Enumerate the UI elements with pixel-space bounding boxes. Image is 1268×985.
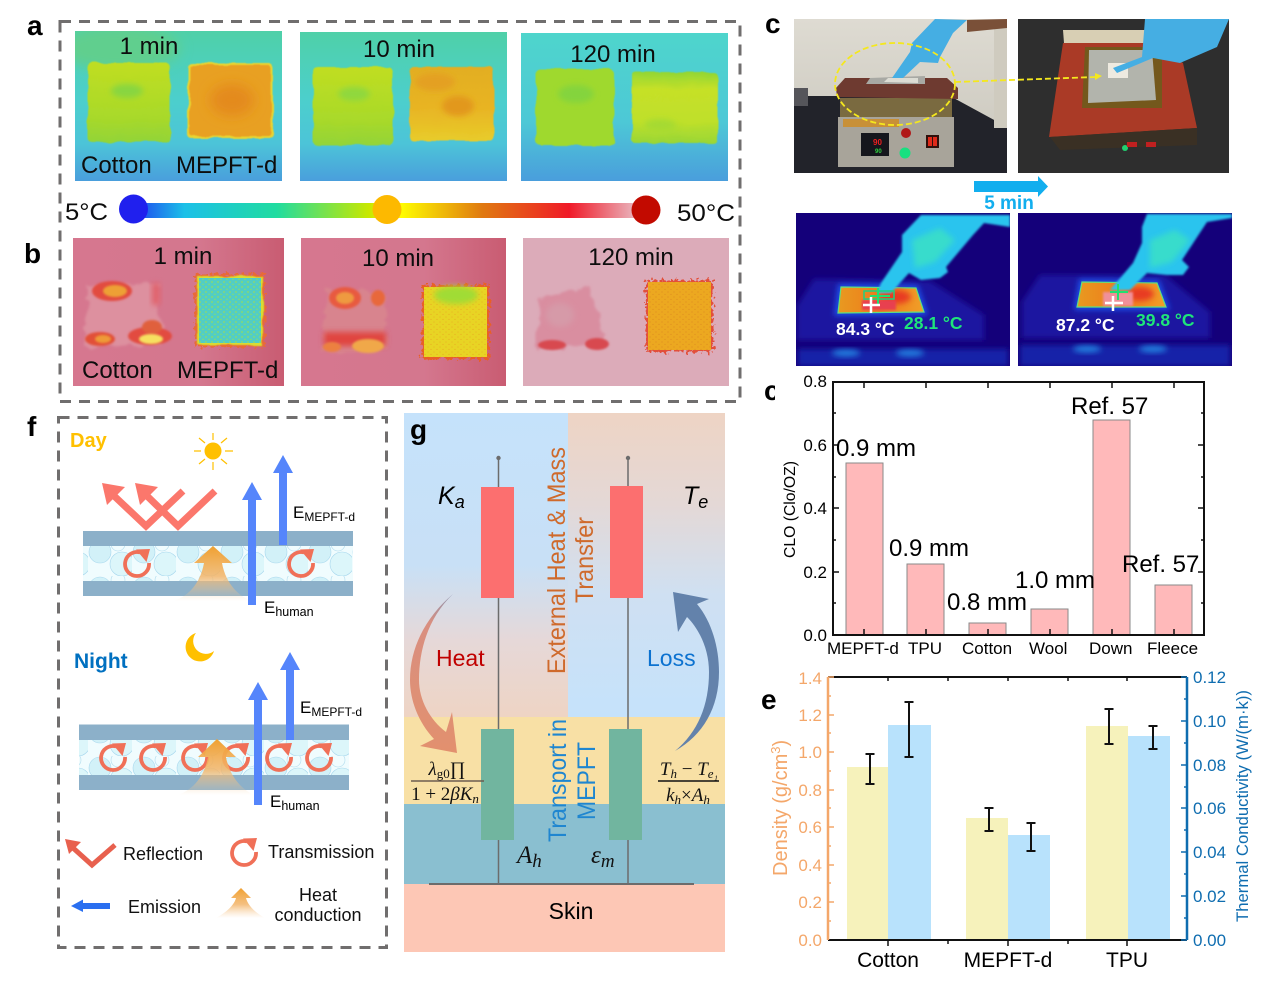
arrow: E MEPFT-d day: [273, 455, 293, 545]
axes and ticks: [833, 382, 1204, 635]
left axis labels: 0.8: [798, 781, 822, 800]
y axis title: CLO (Clo/OZ): [782, 461, 799, 558]
label 120 min: 120 min: [570, 41, 656, 68]
bar annotations: 0.9 mm: [836, 435, 916, 462]
x axis labels: Down: [1089, 639, 1132, 658]
conductivity bars: [888, 725, 1170, 940]
label E human night: E: [270, 792, 281, 811]
arrow: loss: [673, 592, 719, 751]
label Transport in MEPFT: [544, 719, 601, 842]
reading 87.2: 87.2 °C: [1056, 315, 1115, 335]
red resistors: [481, 486, 643, 598]
label Skin: Skin: [549, 898, 593, 924]
reading 84.3: 84.3 °C: [836, 319, 895, 339]
legend: [65, 838, 374, 925]
legend label: reflection: Reflection: [123, 844, 203, 864]
circuit wires: [429, 456, 694, 884]
right axis title: Thermal Conductivity (W/(m·k)): [1233, 690, 1252, 922]
label Transport in MEPFT: MEPFT: [573, 742, 601, 820]
bar chart: CLO: [782, 372, 1204, 658]
y axis labels: 0.4: [803, 499, 827, 518]
arrow: 5 min: [974, 176, 1048, 214]
formula right: h: [675, 792, 681, 807]
right axis labels: 0.06: [1193, 799, 1226, 818]
right axis labels: 0.10: [1193, 712, 1226, 731]
thermal image a 1 min: [60, 26, 282, 181]
left axis labels: 0.0: [798, 931, 822, 950]
label E MEPFT-d day: MEPFT-d: [304, 510, 355, 524]
panel letter c: c: [765, 8, 781, 39]
panel letter f: f: [27, 411, 37, 442]
icon: transmission day left: [125, 549, 150, 576]
panel f: day and night mechanism: [58, 418, 386, 948]
icon: transmission day right: [289, 549, 314, 576]
scale minimum: 5°C: [65, 199, 108, 226]
formula right: h: [670, 766, 677, 781]
temperature colour scale: [65, 194, 735, 227]
label Ka: K: [438, 482, 455, 510]
left axis title: 3: [768, 747, 783, 754]
reading 39.8: 39.8 °C: [1136, 310, 1195, 330]
y axis labels: 0.0: [803, 626, 827, 645]
reading 28.1: 28.1 °C: [904, 313, 963, 333]
yellow dashed circle and pointer: [835, 43, 1102, 125]
bar annotations: 1.0 mm: [1015, 567, 1095, 594]
formula left: [411, 759, 484, 806]
reflection arrows: day: [102, 483, 215, 526]
right axis labels: 0.04: [1193, 843, 1226, 862]
bar annotations: 0.8 mm: [947, 589, 1027, 616]
label MEPFT-d: MEPFT-d: [176, 152, 277, 179]
green resistors: [481, 729, 642, 840]
label epsilon m: m: [601, 851, 615, 872]
formula left: λ: [429, 759, 437, 780]
arrow: E human day: [242, 482, 262, 605]
label External Heat and Mass Transfer: External Heat & Mass: [543, 447, 571, 674]
label epsilon m: ε: [591, 842, 601, 869]
label MEPFT-d: MEPFT-d: [177, 357, 278, 384]
x axis labels: Wool: [1029, 639, 1067, 658]
icons: transmission night: [101, 743, 332, 770]
label Cotton: Cotton: [82, 357, 153, 384]
bar annotations: Ref. 57: [1122, 551, 1199, 578]
label Heat: Heat: [436, 645, 485, 671]
x axis labels: TPU: [1106, 949, 1148, 972]
left axis labels: 1.0: [798, 743, 822, 762]
infrared image before: [796, 213, 1010, 366]
formula left: 1 + 2βK: [411, 784, 472, 805]
label Loss: Loss: [647, 645, 696, 671]
panel letter a: a: [27, 10, 43, 41]
letter g: g: [410, 414, 427, 445]
dashed frame for panels a and b: [60, 22, 740, 402]
x axis labels: Cotton: [857, 949, 919, 972]
label 5 min: 5 min: [984, 193, 1034, 214]
formula right: h: [703, 792, 710, 807]
label Te: e: [698, 492, 708, 512]
left axis title: ): [770, 740, 792, 747]
fabric layers: night: [79, 724, 349, 790]
icon: heat conduction night: [178, 739, 254, 795]
legend icon: heat conduction: [216, 888, 265, 918]
y axis labels: [803, 372, 827, 645]
formula right: −: [677, 759, 697, 780]
label E MEPFT-d day: E: [293, 503, 304, 522]
label 10 min: 10 min: [362, 245, 434, 272]
legend icon: emission: [71, 900, 110, 912]
scale maximum: 50°C: [677, 200, 735, 227]
arrow: heat: [410, 594, 457, 753]
panel g: thermal resistance model: [404, 413, 725, 952]
label 120 min: 120 min: [588, 244, 674, 271]
label Cotton: Cotton: [81, 152, 152, 179]
formula right: k: [666, 785, 675, 806]
arrow: E human night: [248, 682, 268, 805]
formula right: T: [697, 759, 708, 780]
error bars: [866, 702, 1158, 851]
label E human day: E: [264, 598, 275, 617]
label E MEPFT-d night: E: [300, 698, 311, 717]
panel letter b: b: [24, 238, 41, 269]
formula right: e₁: [708, 766, 718, 781]
clipped panel letter: c: [764, 375, 780, 406]
x axis labels: MEPFT-d: [964, 949, 1052, 972]
thermal image b 1 min: [73, 238, 284, 386]
bar annotations: [836, 393, 1199, 616]
x axis labels: [857, 949, 1148, 972]
bar annotations: Ref. 57: [1071, 393, 1148, 420]
right axis labels: [1193, 668, 1226, 950]
label E human day: human: [275, 605, 314, 619]
formula right: [658, 759, 719, 807]
formula left: n: [472, 791, 479, 806]
thermal image b 120 min: [523, 238, 729, 386]
panel letter e: e: [761, 684, 777, 715]
label Ah: A: [517, 842, 532, 869]
infrared image after: [1018, 213, 1232, 366]
left axis title: Density (g/cm: [770, 754, 792, 876]
icon: moon: [186, 633, 214, 661]
heading Night: Night: [74, 650, 128, 673]
label External Heat and Mass Transfer: Transfer: [571, 517, 599, 603]
label 1 min: 1 min: [154, 243, 212, 270]
panel a: outdoor thermal images: [60, 26, 728, 181]
label Transport in MEPFT: Transport in: [544, 719, 572, 842]
icon: sun: [194, 433, 233, 470]
bars: [846, 420, 1192, 635]
thermal image a 120 min: [521, 33, 728, 181]
x axis labels: TPU: [908, 639, 942, 658]
panel c: hot plate photographs: [794, 19, 1229, 173]
heading Day: Day: [70, 430, 108, 452]
formula left: g0: [437, 766, 450, 781]
formula right: T: [660, 759, 670, 780]
label Ka: a: [455, 492, 465, 512]
panel b: hot-plate thermal images: [73, 238, 729, 386]
y axis labels: 0.8: [803, 372, 827, 391]
legend label: heat conduction: Heat: [299, 885, 337, 905]
thermal image b 10 min: [301, 238, 506, 386]
photo: hot plate top view: [1018, 19, 1229, 173]
arrow: E MEPFT-d night: [280, 652, 300, 740]
legend icon: reflection: [65, 839, 115, 865]
density bars: [847, 726, 1128, 940]
label 1 min: 1 min: [120, 33, 178, 60]
x axis labels: Cotton: [962, 639, 1012, 658]
formula left: ∏: [450, 759, 465, 780]
right axis labels: 0.02: [1193, 887, 1226, 906]
thermal image a 10 min: [300, 32, 507, 181]
label E human night: human: [281, 799, 320, 813]
y axis labels: 0.2: [803, 563, 827, 582]
legend label: heat conduction: conduction: [274, 905, 362, 925]
x axis labels: Fleece: [1147, 639, 1198, 658]
label External Heat and Mass Transfer: [543, 447, 599, 674]
label 10 min: 10 min: [363, 36, 435, 63]
photo: hot plate side view: 90: [873, 138, 882, 147]
left axis labels: 0.2: [798, 893, 822, 912]
y axis labels: 0.6: [803, 436, 827, 455]
right axis labels: 0.12: [1193, 668, 1226, 687]
label Te: T: [683, 482, 698, 510]
legend label: transmission: Transmission: [268, 842, 374, 862]
photo: hot plate side view: 90: [875, 149, 882, 155]
left axis labels: 1.4: [798, 669, 822, 688]
formula right: ×: [681, 785, 692, 806]
axes: [828, 677, 1187, 946]
label Ah: h: [532, 851, 542, 872]
left axis labels: 0.4: [798, 856, 822, 875]
photo: hot plate side view: [794, 19, 1007, 173]
icon: heat conduction day: [173, 546, 252, 601]
right axis labels: 0.00: [1193, 931, 1226, 950]
bar chart: density and thermal conductivity: [768, 668, 1252, 972]
legend label: emission: Emission: [128, 897, 201, 917]
legend icon: transmission: [232, 838, 257, 865]
fabric layers: day: [83, 531, 353, 596]
left axis labels: 0.6: [798, 818, 822, 837]
bar annotations: 0.9 mm: [889, 535, 969, 562]
left axis labels: 1.2: [798, 706, 822, 725]
x axis labels: [827, 639, 1198, 658]
left axis labels: [798, 669, 822, 950]
x axis labels: MEPFT-d: [827, 639, 899, 658]
right axis labels: 0.08: [1193, 756, 1226, 775]
formula right: A: [692, 785, 703, 806]
label E MEPFT-d night: MEPFT-d: [311, 705, 362, 719]
panel c: infrared images: [796, 213, 1232, 366]
